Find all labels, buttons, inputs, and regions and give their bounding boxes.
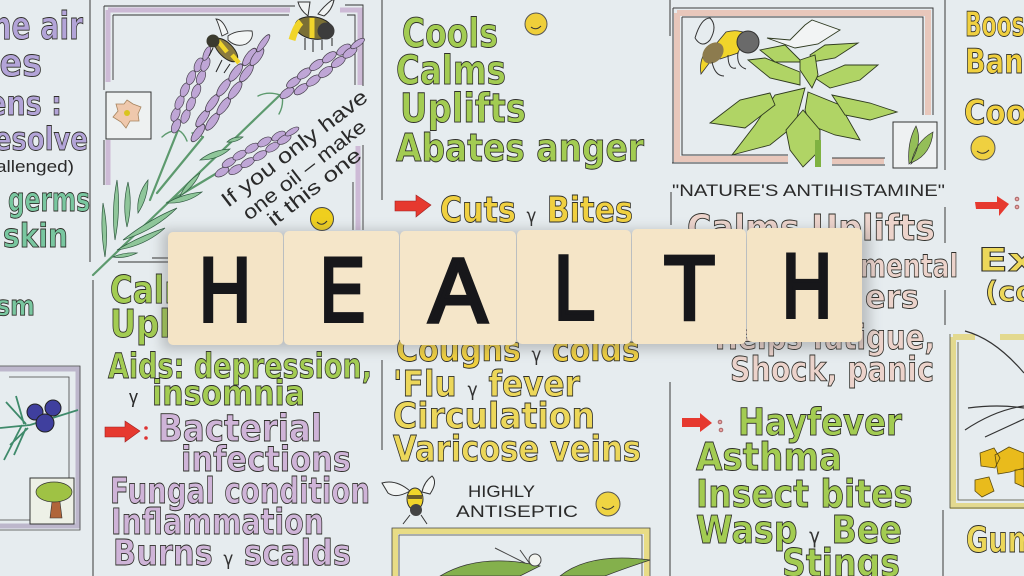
crystals [975, 447, 1024, 497]
tile shadow [162, 230, 870, 350]
lavender flower head [211, 119, 303, 183]
panel: right column green text: Asthma [696, 435, 842, 479]
icon: smiley [310, 208, 334, 230]
panel: centre top text: Abates anger [396, 126, 644, 170]
panel: centre top text [395, 11, 644, 231]
caption: "NATURE'S ANTIHISTAMINE" [672, 181, 945, 200]
icon: smiley [596, 492, 620, 516]
panel: yellow crystal illustration [950, 331, 1024, 508]
panel: yellow frame with leaves [392, 528, 650, 576]
panel: lower left text: Inflammation [111, 502, 324, 543]
panel: right column pink text: mental [860, 247, 958, 285]
icon: smiley [525, 13, 547, 35]
tile: E [284, 231, 399, 345]
icon: bee [382, 476, 435, 524]
icon: red arrow [105, 421, 140, 442]
lavender frame [104, 5, 363, 262]
panel: lower left text: Uplifts [110, 302, 230, 346]
panel: lower left text: Aids: depression, [108, 347, 372, 387]
panel: nature's antihistamine illustration [672, 8, 937, 168]
panel: centre lower text: Circulation [393, 396, 595, 437]
handwritten note: it this one [264, 144, 366, 231]
plant leaves [710, 20, 897, 167]
panel: centre top text: Uplifts [400, 86, 526, 132]
panel: lower left text: γ [129, 387, 138, 407]
tile: A [400, 231, 516, 345]
note: highly antiseptic [456, 482, 578, 521]
panel: centre lower text: Coughs γ colds [396, 330, 640, 370]
panel: far left column text [0, 4, 90, 322]
panel: lower left text: infections [181, 440, 351, 480]
handwritten note: If you only have [217, 85, 372, 212]
pink frame [677, 13, 928, 161]
icon: red arrow [395, 195, 431, 217]
panel: juniper illustration [0, 366, 80, 530]
tile: A: A [429, 241, 487, 342]
panel: lower left text: Calms [110, 268, 215, 312]
note: highly antiseptic: ANTISEPTIC [456, 502, 578, 521]
panel: lower left text: Burns γ scalds [113, 533, 351, 574]
panel: centre lower text [382, 330, 650, 576]
tile: L: L [554, 238, 595, 339]
panel: lower left text: insomnia [152, 374, 305, 414]
handwritten note [217, 85, 372, 231]
tile: H [168, 232, 283, 345]
panel: far left column text: germs [8, 180, 90, 219]
panel: centre top text: Cools [402, 11, 498, 57]
panel: right column green text [682, 401, 913, 576]
icon: smiley [971, 136, 995, 160]
icon: flower box [106, 92, 151, 139]
note: highly antiseptic: HIGHLY [468, 482, 535, 501]
icon: leaf box [893, 122, 937, 168]
handwritten note: one oil – make [239, 116, 371, 225]
icon: red arrow [975, 196, 1009, 216]
tile: H: H [782, 236, 832, 337]
panel: far right column [964, 5, 1024, 561]
panel: far right column: Ex [978, 241, 1024, 279]
icon: bee [695, 18, 759, 76]
panel: centre lower text: Varicose veins [393, 429, 641, 470]
tile: T [632, 229, 746, 344]
panel: right column green text: Hayfever [738, 401, 903, 444]
panel: right column pink text: Shock, panic [730, 350, 934, 390]
tile: T: T [664, 238, 715, 339]
panel: right column pink text: ers [865, 278, 919, 316]
lavender flower head [275, 31, 369, 105]
icon: bee [206, 19, 252, 73]
panel: lower left text [105, 268, 372, 574]
panel: right column pink text: Helps fatigue, [715, 318, 935, 358]
panel: lower left text: Fungal condition [110, 471, 370, 512]
icon: bee [292, 0, 335, 52]
panel: centre top text: Calms [396, 48, 506, 94]
panel: right column green text: Wasp γ Bee [696, 508, 902, 552]
panel: centre top text: Cuts γ Bites [440, 190, 633, 231]
tile: L [517, 230, 631, 344]
icon: tree box [30, 478, 74, 524]
panel: lavender illustration [93, 0, 372, 275]
panel: right column pink text [687, 208, 958, 390]
icon: red arrow [682, 413, 712, 432]
tile: E: E [320, 240, 365, 341]
lavender stems and leaves [93, 93, 283, 275]
lavender flower head [184, 29, 277, 147]
lavender flower head [164, 43, 218, 136]
panel: right column pink text: Calms Uplifts [687, 208, 935, 249]
panel: HEALTH letter tiles [168, 228, 862, 345]
tile: H: H [199, 240, 251, 341]
panel: right column green text: Insect bites [696, 472, 913, 516]
panel: centre lower text: 'Flu γ fever [393, 364, 580, 405]
panel: far left column text: skin [3, 216, 68, 255]
tile: H [747, 228, 862, 342]
panel: lower left text: Bacterial [158, 407, 322, 450]
